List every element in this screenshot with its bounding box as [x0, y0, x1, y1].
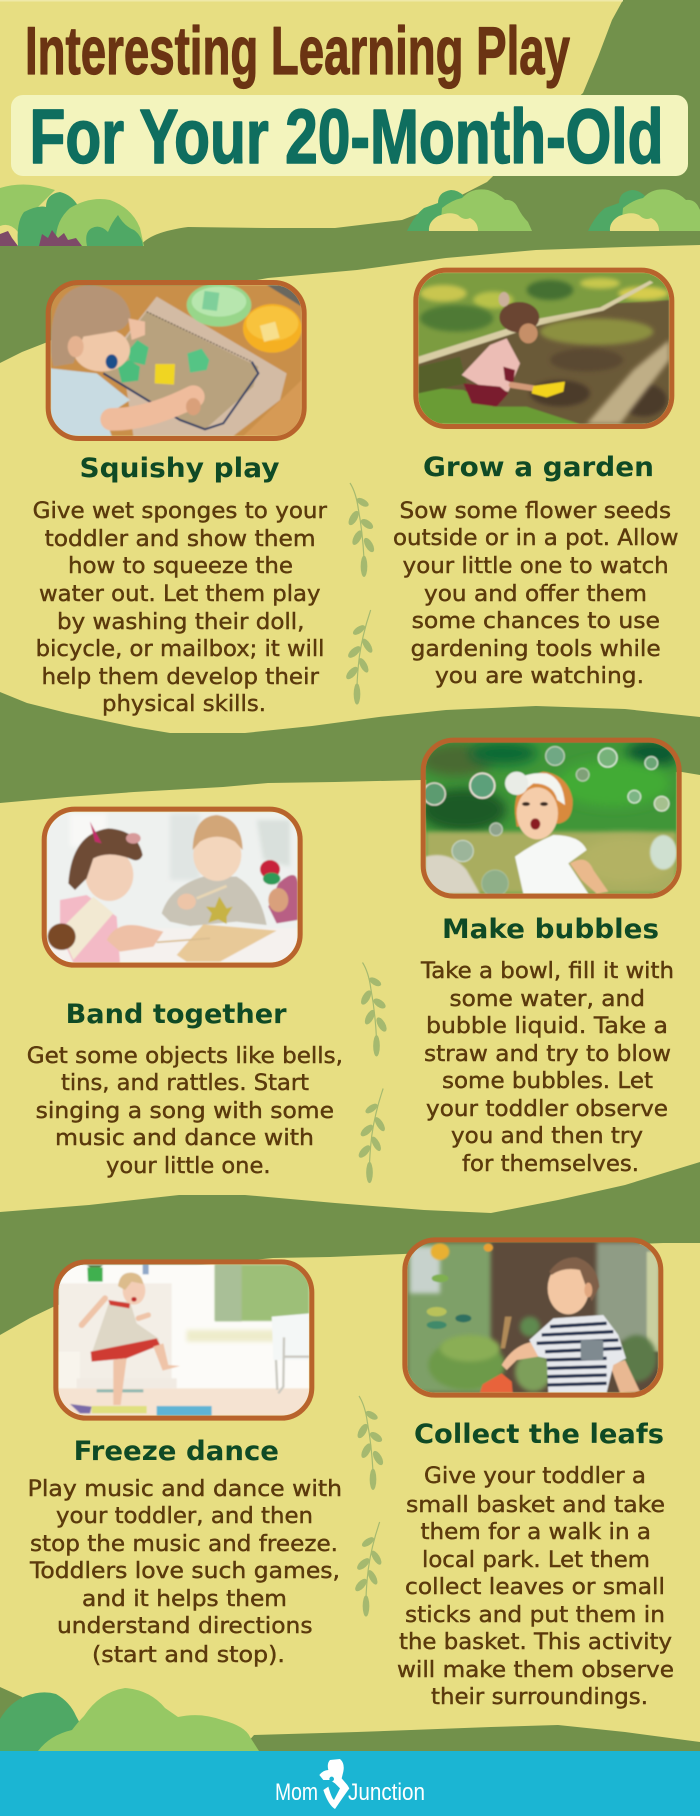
leaf sprig 3 — [359, 962, 389, 1056]
heading: Grow a garden — [423, 452, 654, 483]
body text: bicycle, or mailbox; it will — [36, 637, 324, 662]
body text: sticks and put them in — [405, 1603, 665, 1628]
leaf sprig 2 — [344, 610, 374, 705]
body text: physical skills. — [102, 692, 266, 717]
bushes: top left — [0, 184, 144, 246]
leaf sprig 4 — [357, 1088, 387, 1183]
body text: your toddler observe — [426, 1097, 668, 1122]
photo: child gardening — [416, 270, 672, 426]
body text: will make them observe — [397, 1658, 674, 1683]
body text — [420, 959, 674, 1177]
green landscape band: middle — [0, 692, 700, 803]
body text: the basket. This activity — [399, 1630, 672, 1655]
body text: you are watching. — [435, 664, 644, 689]
body text: some chances to use — [412, 609, 660, 634]
photo: child collecting leaves — [405, 1240, 661, 1395]
heading: Freeze dance — [74, 1436, 279, 1467]
body text: Play music and dance with — [28, 1477, 342, 1502]
body text: for themselves. — [462, 1152, 639, 1177]
body text: small basket and take — [406, 1493, 665, 1518]
body text: gardening tools while — [411, 637, 661, 662]
flowers — [0, 230, 82, 246]
photo: child dancing — [56, 1262, 312, 1418]
body text — [393, 499, 678, 689]
body text: music and dance with — [55, 1126, 314, 1151]
body text: (start and stop). — [92, 1643, 285, 1668]
green landscape band: lower — [0, 1162, 700, 1335]
body text: your little one to watch — [403, 554, 669, 579]
heading: Squishy play — [80, 453, 280, 484]
green landscape band: top — [0, 0, 700, 363]
body text: tins, and rattles. Start — [61, 1071, 309, 1096]
body text: Give wet sponges to your — [33, 499, 328, 524]
body text — [28, 1477, 342, 1668]
body text: toddler and show them — [45, 527, 316, 552]
bush: top right 2 — [588, 189, 700, 231]
body text: some bubbles. Let — [442, 1069, 653, 1094]
panel: grow a garden — [393, 270, 678, 689]
body text: and it helps them — [82, 1587, 287, 1612]
body text: Get some objects like bells, — [27, 1044, 343, 1069]
body text: them for a walk in a — [420, 1520, 651, 1545]
panel: band together — [27, 809, 343, 1179]
body text: how to squeeze the — [68, 554, 293, 579]
top strip — [0, 0, 623, 2]
body text: Give your toddler a — [424, 1464, 646, 1489]
title banner — [11, 94, 688, 180]
body text — [397, 1464, 674, 1710]
icon: mother and child heart — [319, 1759, 349, 1809]
body text: Toddlers love such games, — [29, 1559, 340, 1584]
body text: understand directions — [57, 1614, 312, 1639]
panel: make bubbles — [420, 740, 680, 1177]
body text: bubble liquid. Take a — [426, 1014, 668, 1039]
body text: your toddler, and then — [56, 1504, 313, 1529]
body text: straw and try to blow — [424, 1042, 671, 1067]
body text: Take a bowl, fill it with — [420, 959, 674, 984]
body text: local park. Let them — [422, 1548, 650, 1573]
logo: MomJunction: Junction — [348, 1779, 425, 1806]
body text: Sow some flower seeds — [400, 499, 671, 524]
body text: their surroundings. — [431, 1685, 648, 1710]
body text: water out. Let them play — [39, 582, 320, 607]
leaf sprig 6 — [353, 1522, 383, 1617]
photo: child with bubbles — [420, 740, 680, 897]
bush: top right 1 — [407, 189, 532, 231]
body text: you and offer them — [424, 582, 647, 607]
body text: you and then try — [451, 1124, 643, 1149]
body text — [33, 499, 328, 717]
body text: collect leaves or small — [405, 1575, 665, 1600]
footer bar — [0, 1751, 700, 1816]
green hill: bottom — [0, 1687, 700, 1751]
photo: children playing instruments — [44, 809, 300, 965]
body text: by washing their doll, — [57, 610, 304, 635]
leaf sprig 1 — [346, 483, 376, 577]
body text: help them develop their — [42, 665, 320, 690]
heading: Collect the leafs — [414, 1419, 664, 1450]
panel: freeze dance — [28, 1262, 342, 1668]
body text: stop the music and freeze. — [30, 1532, 338, 1557]
leaf sprig 5 — [355, 1396, 385, 1490]
photo: child with sponges — [48, 282, 304, 438]
body text: some water, and — [450, 987, 645, 1012]
logo: MomJunction: Mom — [275, 1779, 318, 1806]
body text: singing a song with some — [36, 1099, 334, 1124]
body text: your little one. — [106, 1154, 270, 1179]
heading: Make bubbles — [442, 914, 659, 945]
panel: collect the leafs — [397, 1240, 674, 1710]
bushes: bottom left — [0, 1688, 259, 1751]
heading: Band together — [66, 999, 287, 1030]
body text — [27, 1044, 343, 1179]
logo: MomJunction — [275, 1759, 425, 1809]
panel: squishy play — [33, 282, 328, 717]
body text: outside or in a pot. Allow — [393, 526, 678, 551]
